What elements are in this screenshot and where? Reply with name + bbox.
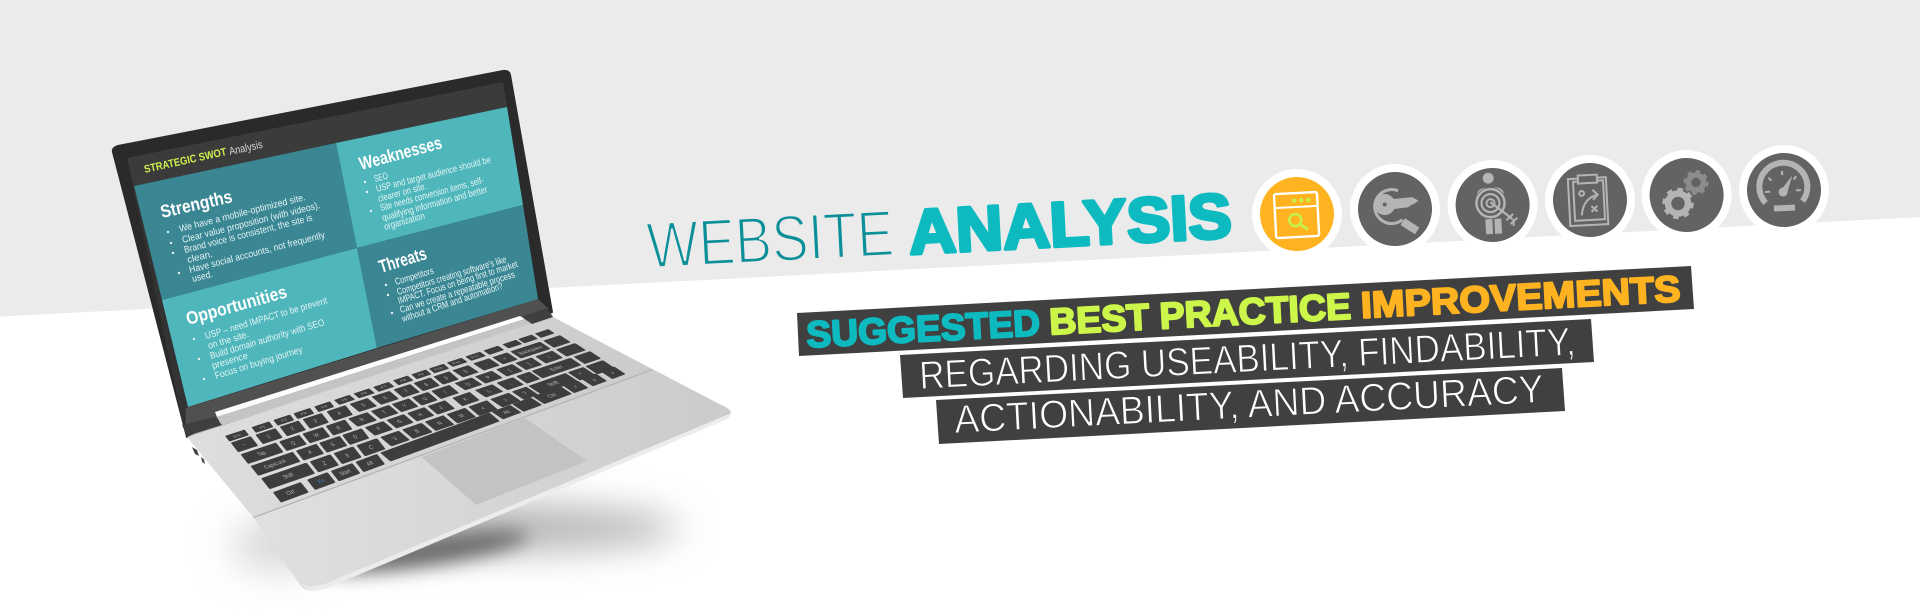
panel: strengths: Clear value proposition (with videos). xyxy=(181,200,321,246)
function key row: F11 xyxy=(451,360,463,365)
function key row: F12 xyxy=(469,354,481,359)
shift key row: B xyxy=(413,429,422,434)
panel: threats xyxy=(357,205,538,348)
home key row: CapsLock xyxy=(263,458,288,471)
number key row: 8 xyxy=(423,382,431,388)
panel: weaknesses: clearer on site. xyxy=(377,181,428,205)
number key row: 5 xyxy=(360,403,368,408)
QWERTY key row: E xyxy=(336,425,343,431)
shift key row: M xyxy=(458,413,467,419)
trackpad xyxy=(422,418,587,505)
function key row: F5 xyxy=(340,397,349,402)
shift key row: C xyxy=(368,445,375,451)
home key row: S xyxy=(330,442,337,448)
bottom key row: > xyxy=(609,371,618,376)
home key row: ; xyxy=(508,382,515,386)
QWERTY key row: W xyxy=(313,433,321,439)
function key row: F7 xyxy=(379,384,389,389)
panel: weaknesses: Site needs conversion items, self- xyxy=(379,175,485,214)
panel: opportunities: Build domain authority with SEO xyxy=(209,317,326,362)
icon: target person xyxy=(1445,158,1540,252)
panel: threats: Threats xyxy=(376,243,429,277)
title: website analysis xyxy=(645,181,1233,282)
home key row: A xyxy=(307,450,314,456)
title: website analysis: ANALYSIS xyxy=(907,181,1233,268)
panel: threats: IMPACT. Focus on being first to market xyxy=(397,259,519,307)
function key row: F8 xyxy=(399,378,408,382)
function key row: F1 xyxy=(259,424,267,429)
bottom key row: Alt xyxy=(366,460,375,468)
panel: strengths: Have social accounts, not frequently xyxy=(188,230,326,276)
background: slanted grey band xyxy=(0,0,1920,316)
number key row: 2 xyxy=(290,426,296,432)
home key row: D xyxy=(352,434,360,441)
shift key row: X xyxy=(344,453,352,459)
number key row: 9 xyxy=(443,376,451,381)
function key row: F9 xyxy=(417,372,426,377)
slide title: Analysis xyxy=(228,139,264,158)
panel: opportunities: presence xyxy=(211,351,249,372)
panel: threats: Can we create a repeatable process xyxy=(399,269,517,316)
icon: gears xyxy=(1639,148,1734,242)
home key row xyxy=(250,351,601,476)
bottom key row: v xyxy=(591,378,599,383)
QWERTY key row: Y xyxy=(401,403,410,409)
panel: opportunities: on the site. xyxy=(207,329,250,352)
home key row: F xyxy=(376,426,384,432)
panel: weaknesses: organization xyxy=(383,211,426,233)
QWERTY key row: R xyxy=(358,417,367,423)
number key row: = xyxy=(501,357,509,361)
bottom key row: Ctrl xyxy=(285,489,297,497)
function key row: F2 xyxy=(280,417,289,422)
shift key row xyxy=(261,360,615,489)
panel: threats: without a CRM and automation? xyxy=(400,281,505,325)
panel: strengths: Brand voice is consistent, the site is xyxy=(183,213,314,256)
bottom key row: Fn xyxy=(317,478,327,485)
panel: strengths: clean. xyxy=(186,249,214,266)
function key row xyxy=(225,329,555,442)
number key row xyxy=(231,335,571,452)
icon: key and magnifier xyxy=(1348,162,1442,256)
icon: speedometer xyxy=(1737,143,1831,237)
panel: weaknesses: USP and target audience should be xyxy=(375,155,492,195)
left hinge xyxy=(182,417,222,436)
function key row: F10 xyxy=(433,366,445,371)
panel: threats: Competitors creating software's like xyxy=(396,254,508,298)
QWERTY key row: O xyxy=(464,382,473,387)
shift key row: N xyxy=(436,421,445,427)
panel: opportunities xyxy=(162,248,377,407)
QWERTY key row: Q xyxy=(290,440,297,447)
shift key row: > xyxy=(502,398,511,403)
QWERTY key row: T xyxy=(381,410,389,415)
shift key row: ^ xyxy=(578,372,586,377)
number key row: 7 xyxy=(403,389,411,394)
QWERTY key row: ] xyxy=(526,362,533,366)
banner: regarding useability, findability: REGARDING USEABILITY, FINDABILITY, xyxy=(918,320,1577,398)
shift key row: V xyxy=(392,436,400,442)
slide title: STRATEGIC SWOT xyxy=(143,146,228,176)
laptop shadow xyxy=(230,504,680,582)
number key row: 0 xyxy=(462,370,470,374)
shift key row: Shift xyxy=(546,381,562,388)
bottom key row xyxy=(273,367,626,503)
QWERTY key row: U xyxy=(421,397,430,402)
home key row: H xyxy=(417,412,425,418)
banner: actionability and accuracy: ACTIONABILITY, AND ACCURACY xyxy=(953,367,1545,442)
function key row: F3 xyxy=(300,411,308,416)
banner: suggested best practice improvements: SUGGESTED xyxy=(805,302,1041,355)
function key row: F6 xyxy=(360,391,369,395)
number key row: - xyxy=(484,363,491,367)
shift key row: < xyxy=(480,406,488,411)
shift key row: ? xyxy=(522,391,531,396)
hinge strip xyxy=(215,316,529,425)
home key row: ' xyxy=(525,376,532,380)
banner: suggested best practice improvements xyxy=(797,266,1694,356)
bottom key row: Start xyxy=(339,469,353,477)
QWERTY key row xyxy=(240,343,586,464)
number key row: 6 xyxy=(382,396,390,401)
home key row: L xyxy=(485,389,493,394)
number key row: Backspace xyxy=(517,345,545,356)
right hinge xyxy=(522,308,553,324)
panel: opportunities: USP – need IMPACT to be prevent xyxy=(204,295,329,342)
home key row: G xyxy=(396,419,405,425)
home key row: K xyxy=(462,397,470,402)
title: website analysis: WEBSITE xyxy=(645,196,895,282)
shift key row: Shift xyxy=(282,472,296,481)
QWERTY key row: I xyxy=(443,390,449,395)
panel: threats: Competitors xyxy=(394,266,435,288)
panel: opportunities: Opportunities xyxy=(184,282,289,329)
panel: strengths: Strengths xyxy=(158,186,234,222)
bottom key row: Alt xyxy=(502,410,513,416)
banner: suggested best practice improvements: IMPROVEMENTS xyxy=(1360,268,1681,326)
bottom key row: < xyxy=(572,385,581,390)
icon: browser search (active) xyxy=(1250,167,1344,261)
QWERTY key row: P xyxy=(485,375,494,380)
laptop xyxy=(113,71,731,591)
bottom key row: Ctrl xyxy=(546,393,559,399)
panel: strengths: used. xyxy=(191,269,214,285)
laptop lid xyxy=(113,71,552,437)
function key row: F4 xyxy=(320,404,329,409)
keyboard xyxy=(225,329,626,503)
number key row: 4 xyxy=(336,411,343,417)
laptop screen: SWOT slide xyxy=(134,107,538,407)
QWERTY key row: \ xyxy=(546,355,554,360)
number key row: 1 xyxy=(266,434,272,440)
icon: clipboard play xyxy=(1543,153,1637,247)
home key row: Enter xyxy=(549,365,566,372)
panel: weaknesses: qualifying information and better xyxy=(381,184,490,224)
panel: strengths: We have a mobile-optimized site. xyxy=(178,192,307,235)
panel: opportunities: Focus on buying journey xyxy=(214,344,304,382)
panel: strengths xyxy=(134,143,357,300)
panel: weaknesses: SEO xyxy=(373,171,389,185)
QWERTY key row: Tap xyxy=(256,450,268,458)
laptop base xyxy=(187,317,731,591)
banner: suggested best practice improvements: BEST PRACTICE xyxy=(1048,286,1352,342)
number key row: 3 xyxy=(313,419,319,425)
function key row: Esc xyxy=(232,433,242,438)
panel: weaknesses: Weaknesses xyxy=(357,133,444,174)
home key row: J xyxy=(438,406,445,411)
shift key row: Z xyxy=(321,461,329,467)
panel: weaknesses xyxy=(336,107,523,248)
QWERTY key row: [ xyxy=(507,369,514,373)
number key row: ~ xyxy=(242,442,248,448)
